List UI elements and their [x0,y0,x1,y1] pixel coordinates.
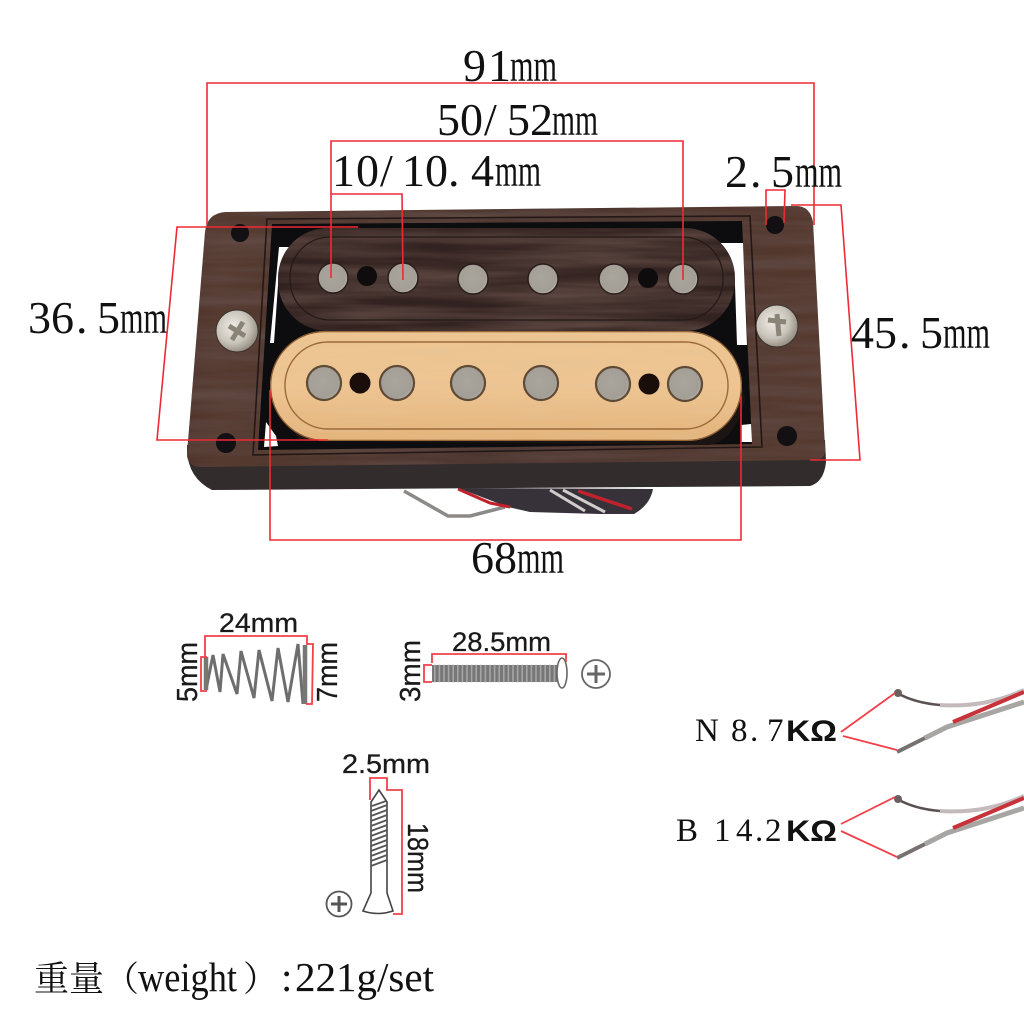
neck pickup resistance [695,689,1024,752]
label: 91mm: 91 [463,40,511,91]
label: 36.5mm: mm [120,292,167,343]
screw dimension lines [424,654,566,682]
label: 2.5mm: 2.5 [725,146,794,197]
screw hole [350,372,370,394]
label: 45.5mm: 45.5 [851,307,943,358]
mounting hole top left [231,224,249,242]
weight text: : [281,954,292,1000]
weight text: ） [243,960,278,999]
pole piece row [307,366,702,401]
label: 2.5mm: mm [795,146,842,197]
label: 36.5mm: 36.5 [28,292,120,343]
frame window [258,221,752,450]
bridge pickup resistance [676,795,1024,858]
screw hole [357,266,377,286]
white gap bottom right [741,424,752,442]
height screw right [756,305,798,347]
label: 50/52mm: 50/52 [437,94,553,145]
wood screw diagram [326,749,433,916]
mounting hole bottom right [777,426,797,446]
label: 50/52mm: mm [552,94,598,145]
label: B 14.2: B 14.2 [676,813,782,849]
white gap top right [720,243,747,345]
label: kilohm: KΩ [786,815,837,848]
mounting frame: wood ring [180,200,830,490]
screw dimension lines [370,778,402,914]
label: 18mm: 18mm [401,823,433,893]
pole piece row [318,263,698,294]
label: 68mm: mm [517,532,564,583]
label: 28.5mm: 28.5mm [452,627,551,657]
label: 10/10.4mm: mm [495,145,541,196]
wire leads [894,795,1024,858]
spring dimension lines [201,636,313,704]
label: N 8.7: N 8.7 [695,713,784,749]
white gap top left [270,247,292,343]
label: 2.5mm: 2.5mm [342,749,430,779]
weight text: 重量 [34,960,104,999]
red dimension lines on pickup [157,83,860,540]
label: 10/10.4mm: 10/10.4 [332,145,494,196]
wires under the pickup [404,488,653,516]
screw hole [638,374,660,394]
label: 7mm: 7mm [312,642,344,702]
label: kilohm: KΩ [786,715,837,748]
label: 68mm: 68 [471,532,517,583]
label: 91mm: mm [510,40,557,91]
label: 45.5mm: mm [943,307,990,358]
label: 3mm: 3mm [395,640,427,702]
label: 24mm: 24mm [219,608,298,638]
weight text: weight [138,954,238,1000]
weight text: 221g/set [295,954,435,1000]
wire leads [894,689,1024,752]
height screw left [216,310,258,352]
red pointer lines [841,693,897,750]
icon: phillips head [582,660,610,688]
label: 5mm: 5mm [172,642,204,702]
weight text: （ [104,960,139,999]
icon: phillips head [326,892,352,916]
red pointer lines [841,797,897,857]
mounting hole top right [766,216,784,234]
maple pickup [268,329,745,445]
dark wood pickup [275,225,740,335]
white gap bottom left [264,422,278,447]
mounting hole bottom left [216,433,236,453]
long machine screw diagram [395,627,610,702]
screw hole [638,268,658,288]
spring diagram [172,608,344,704]
